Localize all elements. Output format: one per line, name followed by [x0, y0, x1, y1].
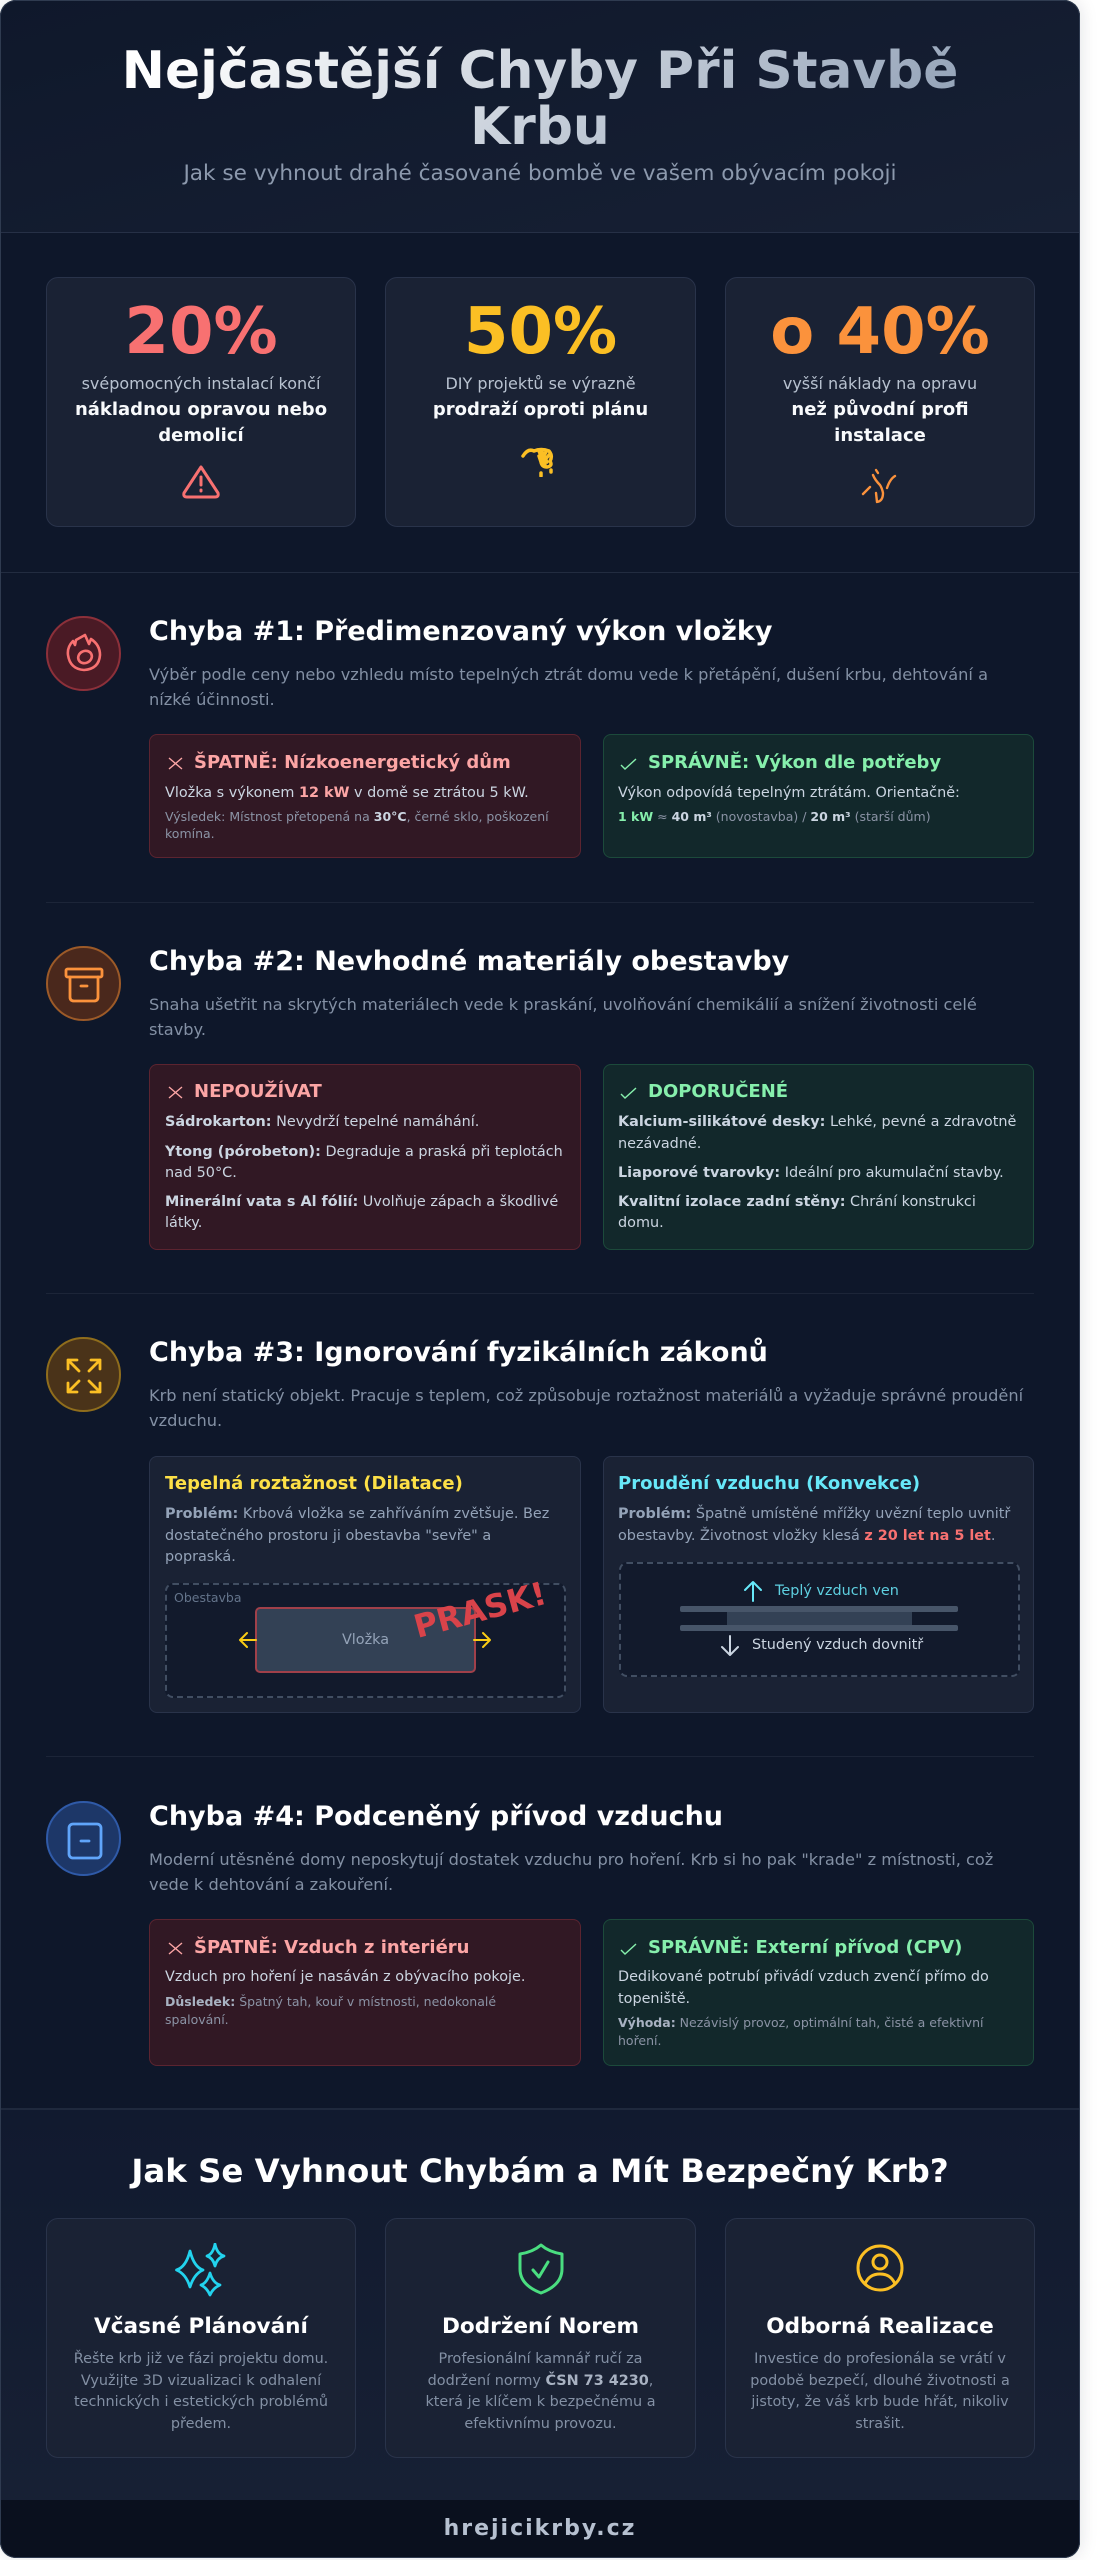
description — [149, 995, 977, 1039]
box text: dostatečného prostoru ji obestavba "sevře" a — [165, 1528, 491, 1544]
warm air label: Teplý vzduch ven — [775, 1583, 899, 1599]
box text: topeniště. — [618, 1991, 690, 2007]
stat card: 20% — [46, 277, 356, 527]
list: Minerální vata s Al fólií: Uvolňuje zápach a škodlivé — [165, 1194, 558, 1210]
box result — [165, 1994, 496, 2027]
section: how to avoid — [0, 2108, 1080, 2500]
icon: warning triangle — [182, 465, 220, 498]
box text — [165, 1506, 549, 1565]
icon: sparkles — [175, 2243, 226, 2296]
tip text: efektivnímu provozu. — [464, 2416, 617, 2432]
description: vede k dehtování a zakouření. — [149, 1875, 393, 1894]
box heading: NEPOUŽÍVAT — [194, 1081, 322, 1102]
box heading: ŠPATNĚ: Nízkoenergetický dům — [194, 752, 511, 773]
section: chyba 4 — [46, 1801, 1034, 2066]
description: nízké účinnosti. — [149, 690, 275, 709]
panel: do not use — [149, 1064, 581, 1250]
cold air label: Studený vzduch dovnitř — [752, 1637, 923, 1653]
description: Snaha ušetřit na skrytých materiálech vede k praskání, uvolňování chemikálií a snížení životnosti celé — [149, 995, 977, 1014]
box text: Problém: Krbová vložka se zahříváním zvětšuje. Bez — [165, 1506, 549, 1522]
box text: Dedikované potrubí přivádí vzduch zvenčí přímo do — [618, 1969, 989, 1985]
description: stavby. — [149, 1020, 206, 1039]
box text: obestavby. Životnost vložky klesá z 20 let na 5 let. — [618, 1528, 996, 1544]
box text — [618, 1504, 1010, 1544]
stat text: než původní profi — [791, 399, 969, 420]
description: Moderní utěsněné domy neposkytují dostatek vzduchu pro hoření. Krb si ho pak "krade" z místnosti, což — [149, 1850, 993, 1869]
icon: flame — [46, 616, 121, 691]
icon: user circle — [856, 2244, 904, 2292]
tip card: standards — [385, 2218, 696, 2458]
heading: Chyba #2: Nevhodné materiály obestavby — [149, 946, 789, 977]
section: chyba 2 — [46, 946, 1034, 1250]
box text: Výkon odpovídá tepelným ztrátám. Orientačně: — [618, 785, 960, 801]
tip text: Využijte 3D vizualizaci k odhalení — [81, 2373, 321, 2389]
insert block: Vložka — [342, 1632, 389, 1648]
arrow: cold air — [721, 1635, 739, 1656]
stat text — [783, 374, 977, 446]
box benefit: Výhoda: Nezávislý provoz, optimální tah, čisté a efektivní — [618, 2015, 983, 2030]
box result: komína. — [165, 826, 215, 841]
description: Krb není statický objekt. Pracuje s teplem, což způsobuje roztažnost materiálů a vyžaduje správné proudění — [149, 1386, 1023, 1405]
box heading: Tepelná roztažnost (Dilatace) — [165, 1473, 463, 1494]
icon: shield check — [518, 2244, 564, 2294]
tip text: která je klíčem k bezpečnému a — [425, 2394, 656, 2410]
ducts — [680, 1606, 958, 1631]
stat card: 50% — [385, 277, 696, 527]
description: vzduchu. — [149, 1411, 222, 1430]
stats section — [0, 233, 1080, 573]
subtitle: Jak se vyhnout drahé časované bombě ve vašem obývacím pokoji — [183, 161, 897, 186]
box heading: Proudění vzduchu (Konvekce) — [618, 1473, 920, 1494]
panel: correct — [603, 734, 1034, 858]
panel: thermal expansion — [149, 1456, 581, 1713]
list: Liaporové tvarovky: Ideální pro akumulační stavby. — [618, 1165, 1004, 1181]
stat text: vyšší náklady na opravu — [783, 374, 977, 393]
description: Výběr podle ceny nebo vzhledu místo tepelných ztrát domu vede k přetápění, dušení krbu, dehtování a — [149, 665, 988, 684]
heading: Chyba #4: Podceněný přívod vzduchu — [149, 1801, 723, 1832]
diagram: dilatation — [165, 1583, 566, 1698]
stat text — [433, 374, 648, 420]
box benefit: hoření. — [618, 2033, 662, 2048]
list: nezávadné. — [618, 1136, 701, 1152]
box result: Výsledek: Místnost přetopená na 30°C, černé sklo, poškození — [165, 809, 549, 824]
box heading: SPRÁVNĚ: Výkon dle potřeby — [648, 752, 941, 773]
tip text: Profesionální kamnář ručí za — [439, 2351, 642, 2367]
stat text: demolicí — [158, 425, 244, 446]
box result — [165, 809, 549, 841]
icon: coin blob — [521, 448, 554, 477]
stat number: o 40% — [770, 295, 990, 369]
list: Ytong (pórobeton): Degraduje a praská při teplotách — [165, 1144, 563, 1160]
title — [46, 43, 1034, 155]
header — [0, 0, 1080, 233]
label: cladding: Obestavba — [174, 1590, 242, 1605]
box benefit — [618, 2015, 984, 2048]
heading: Chyba #1: Předimenzovaný výkon vložky — [149, 616, 772, 647]
tip text — [74, 2350, 328, 2432]
list: domu. — [618, 1215, 664, 1231]
insert block — [255, 1607, 476, 1673]
tip text: Řešte krb již ve fázi projektu domu. — [74, 2351, 328, 2367]
panel: convection — [603, 1456, 1034, 1713]
stat number: 20% — [124, 295, 278, 369]
title: Krbu — [470, 97, 610, 157]
stat text: svépomocných instalací končí — [82, 374, 320, 393]
crack label: PRASK! — [410, 1574, 550, 1646]
footer — [0, 2500, 1080, 2558]
box text — [618, 1969, 989, 2007]
arrow: warm air — [744, 1581, 762, 1602]
stat text — [75, 374, 327, 446]
arrow: right expansion — [473, 1632, 491, 1648]
list — [164, 1114, 563, 1231]
stat text: instalace — [834, 425, 926, 446]
tip card: realization — [725, 2218, 1035, 2458]
icon: check — [620, 1944, 636, 1955]
tip title: Včasné Plánování — [94, 2314, 308, 2339]
footer: hrejicikrby.cz — [444, 2516, 636, 2541]
icon: crack — [862, 468, 896, 504]
stat card: o 40% — [725, 277, 1035, 527]
box result: Důsledek: Špatný tah, kouř v místnosti, nedokonalé — [165, 1994, 496, 2009]
section: chyba 3 — [46, 1337, 1034, 1713]
tip text: Investice do profesionála se vrátí v — [754, 2351, 1006, 2367]
tip title: Odborná Realizace — [766, 2314, 994, 2339]
box formula: 1 kW ≈ 40 m³ (novostavba) / 20 m³ (starší dům) — [618, 809, 931, 824]
diagram: airflow — [619, 1562, 1020, 1677]
tip card: planning — [46, 2218, 356, 2458]
list: nad 50°C. — [165, 1165, 237, 1181]
list: Sádrokarton: Nevydrží tepelné namáhání. — [165, 1114, 479, 1130]
list: Kvalitní izolace zadní stěny: Chrání konstrukci — [618, 1194, 976, 1210]
icon: expand arrows — [46, 1337, 121, 1412]
box heading: DOPORUČENÉ — [648, 1081, 788, 1102]
box text: Vzduch pro hoření je nasáván z obývacího pokoje. — [165, 1969, 525, 1985]
stat text: DIY projektů se výrazně — [445, 374, 636, 393]
list — [618, 1114, 1016, 1231]
section: chyba 1 — [46, 616, 1034, 858]
icon: check — [620, 758, 636, 770]
stat text: prodraží oproti plánu — [433, 399, 648, 420]
icon: cross — [168, 758, 182, 770]
tip text: podobě bezpečí, dlouhé životnosti a — [750, 2373, 1010, 2389]
stat text: nákladnou opravou nebo — [75, 399, 327, 420]
icon: cross — [168, 1086, 182, 1098]
panel: correct — [603, 1919, 1034, 2066]
tip text: strašit. — [855, 2416, 905, 2432]
box heading: SPRÁVNĚ: Externí přívod (CPV) — [648, 1937, 962, 1958]
box text: Vložka s výkonem 12 kW v domě se ztrátou 5 kW. — [165, 785, 529, 801]
box text: popraská. — [165, 1549, 236, 1565]
box heading: ŠPATNĚ: Vzduch z interiéru — [194, 1937, 469, 1958]
panel: recommended — [603, 1064, 1034, 1250]
description — [149, 665, 988, 709]
heading: Chyba #3: Ignorování fyzikálních zákonů — [149, 1337, 768, 1368]
tip text: předem. — [171, 2416, 231, 2432]
section heading: Jak Se Vyhnout Chybám a Mít Bezpečný Krb? — [131, 2152, 949, 2190]
icon: archive — [46, 946, 121, 1021]
box text: Problém: Špatně umístěné mřížky uvězní teplo uvnitř — [618, 1506, 1010, 1522]
icon: air vent — [46, 1801, 121, 1876]
icon: cross — [168, 1942, 182, 1954]
tip text — [726, 2348, 1034, 2436]
box result: spalování. — [165, 2012, 229, 2027]
icon: check — [620, 1088, 636, 1099]
tip text: dodržení normy ČSN 73 4230, — [428, 2373, 653, 2389]
stat number: 50% — [464, 295, 617, 369]
list: látky. — [165, 1215, 202, 1231]
tip text: technických i estetických problémů — [74, 2394, 328, 2410]
panel: wrong — [149, 1919, 581, 2066]
tip text: jistoty, že váš krb bude hřát, nikoliv — [751, 2394, 1009, 2410]
list: Kalcium-silikátové desky: Lehké, pevné a zdravotně — [618, 1114, 1016, 1130]
arrow: left expansion — [239, 1632, 257, 1648]
tip title: Dodržení Norem — [442, 2314, 639, 2339]
title: Nejčastější Chyby Při Stavbě — [122, 41, 958, 101]
panel: wrong — [149, 734, 581, 858]
description — [149, 1386, 1024, 1430]
description — [149, 1850, 993, 1894]
tip text — [425, 2351, 656, 2432]
